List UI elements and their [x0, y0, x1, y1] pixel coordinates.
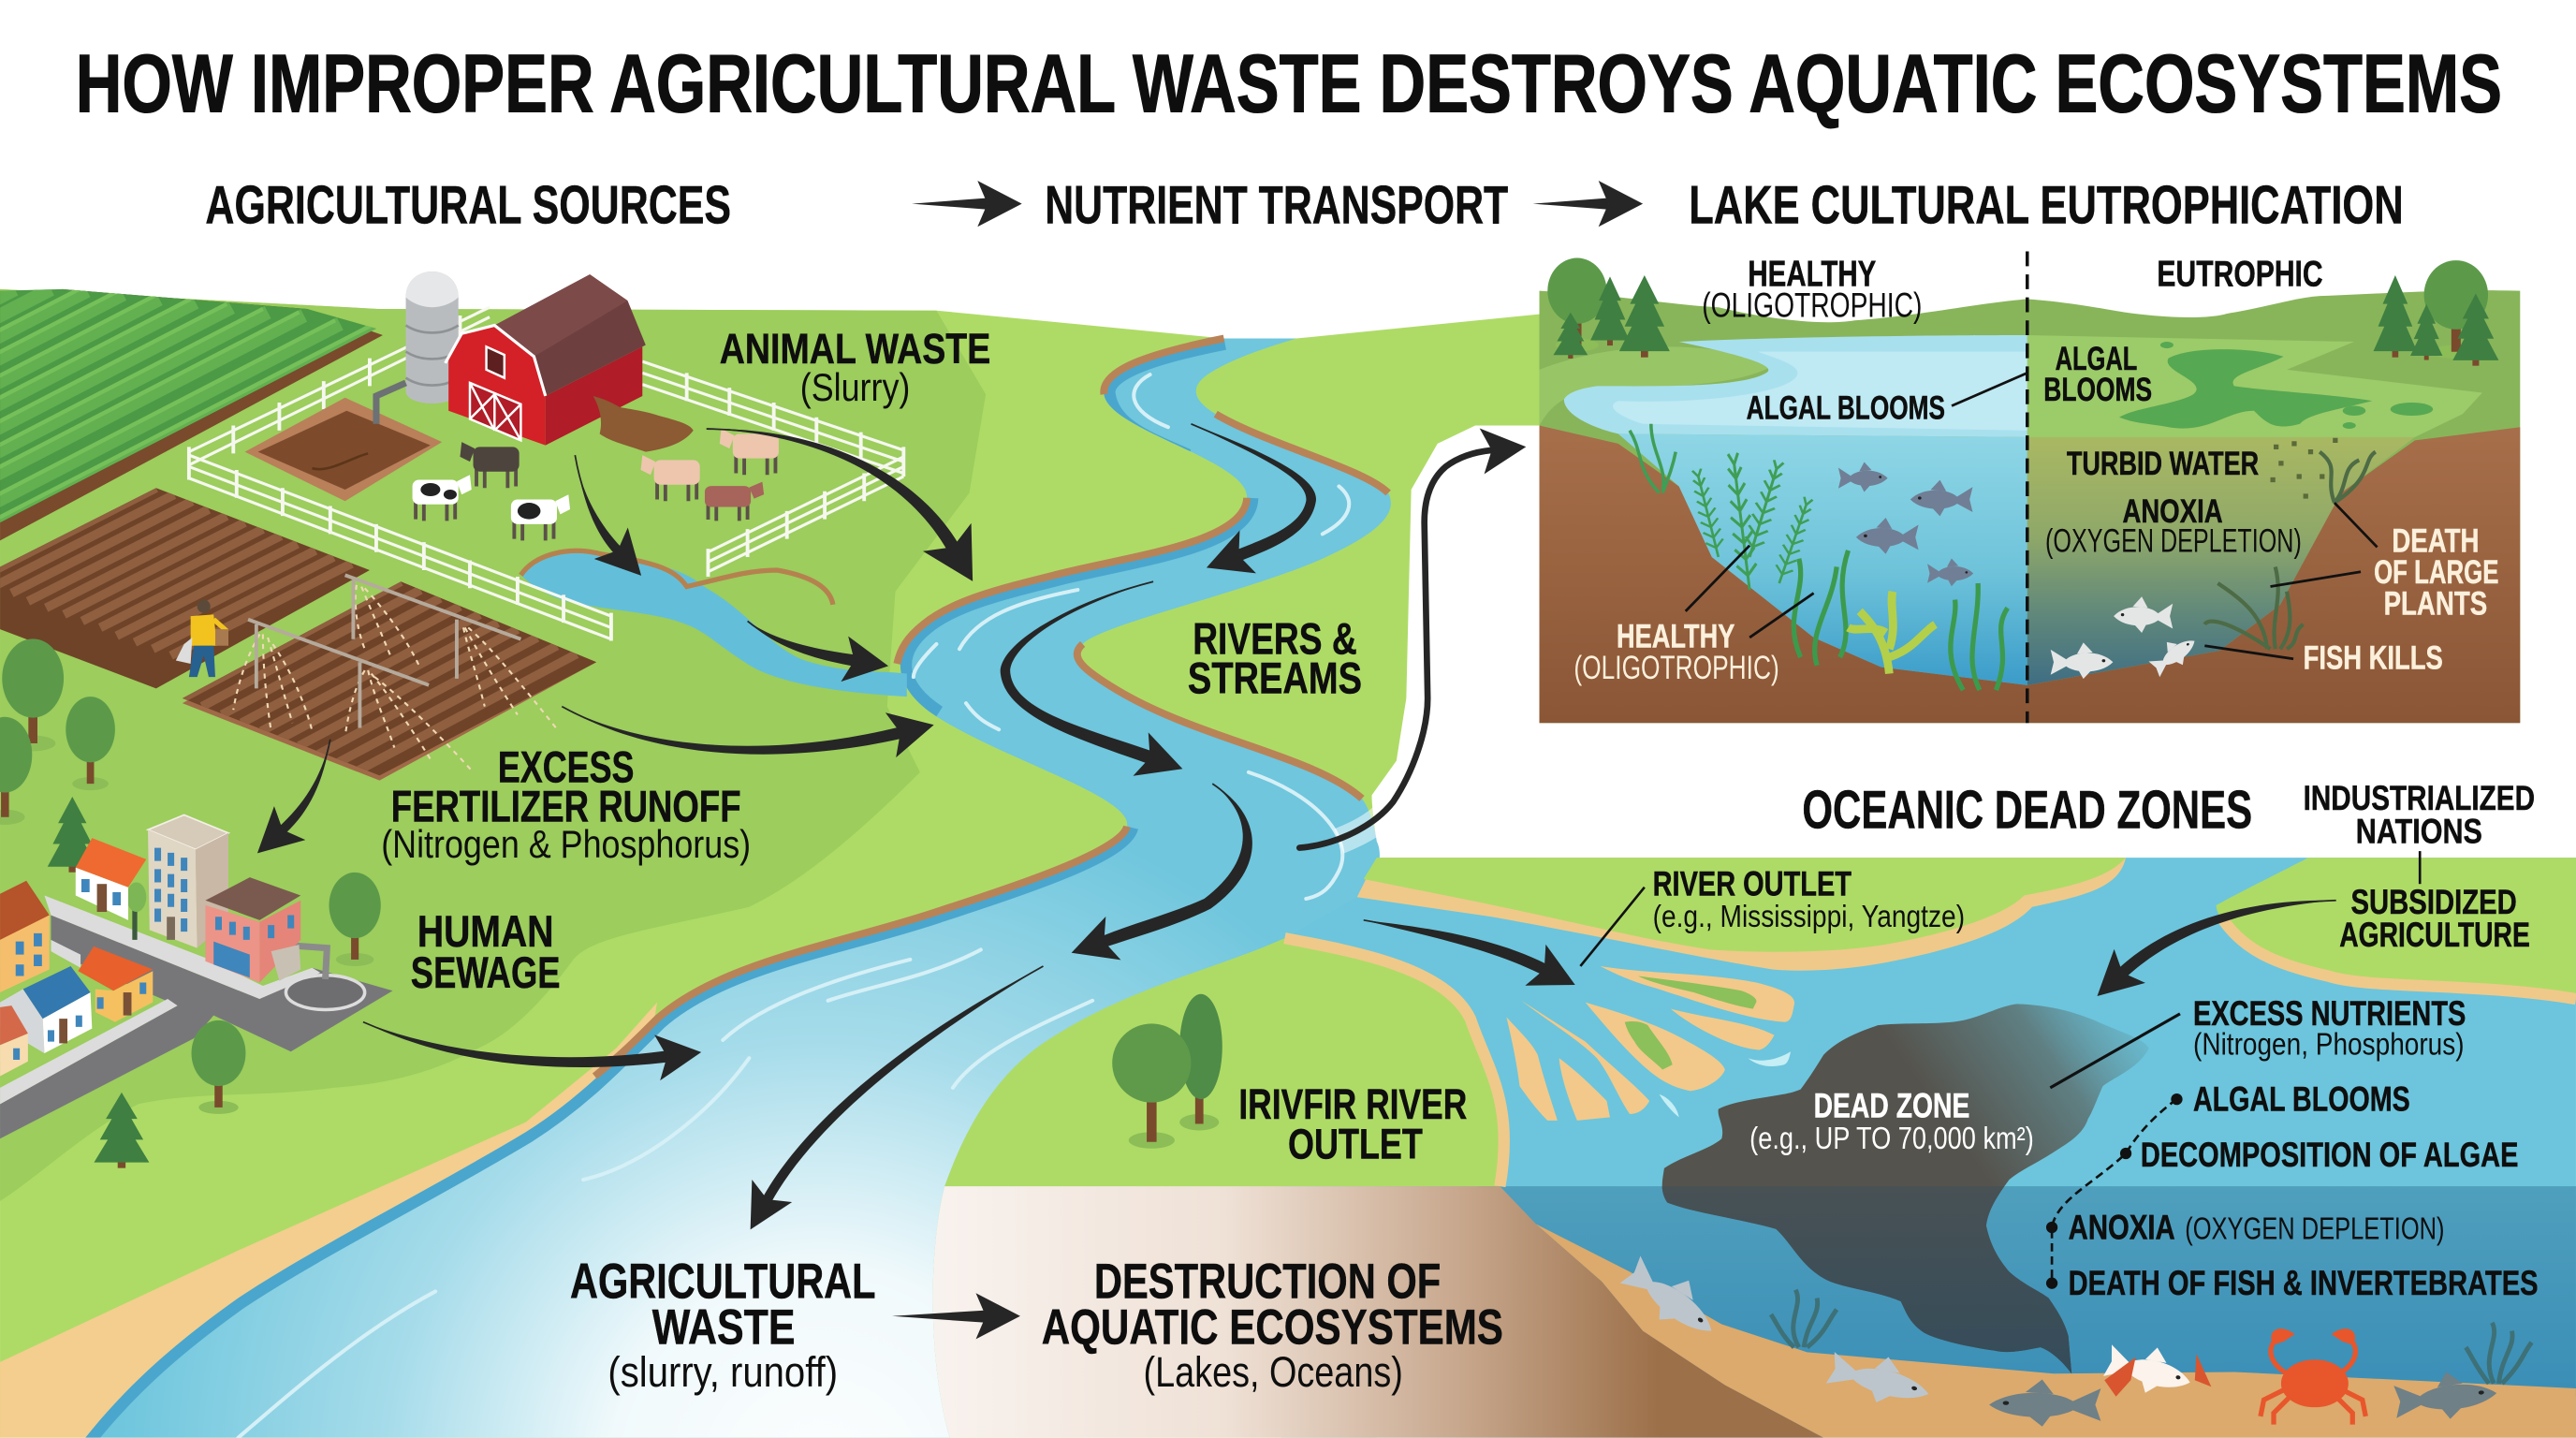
- lake: small algae dots: [2160, 342, 2433, 429]
- lake: label algal blooms eutrophic: [2043, 341, 2152, 408]
- heading: nutrient transport: NUTRIENT TRANSPORT: [1045, 176, 1508, 236]
- white margin behind lake panel and ocean heading: [1372, 426, 2576, 858]
- label: excess fertilizer runoff: [381, 742, 751, 866]
- label: excess nutrients: [2193, 994, 2466, 1063]
- arrow: waste to destruction: [892, 1311, 986, 1323]
- label: excess nutrients: (Nitrogen, Phosphorus): [2193, 1028, 2465, 1063]
- lake: healthy fish: [1838, 462, 1973, 586]
- holstein cow two: [511, 494, 570, 540]
- label: excess nutrients: EXCESS NUTRIENTS: [2193, 994, 2466, 1033]
- top right land: [2217, 858, 2576, 994]
- iriver land with trees: [944, 938, 1504, 1186]
- tall building: [148, 814, 228, 948]
- label: river outlet delta: (e.g., Mississippi, Yangtze): [1653, 900, 1965, 934]
- land: darker pasture hill: [0, 289, 986, 1201]
- heading: oceanic dead zones: OCEANIC DEAD ZONES: [1802, 781, 2252, 841]
- trees left: [0, 638, 381, 1168]
- label: animal waste: ANIMAL WASTE: [720, 325, 990, 373]
- silver fish two: [1824, 1343, 1935, 1415]
- timeline: algal blooms: ALGAL BLOOMS: [2193, 1079, 2410, 1118]
- arrow: field to town: [279, 740, 330, 833]
- sewage tank: [281, 945, 365, 1009]
- fence: [189, 307, 903, 640]
- label: river outlet land: [1238, 1080, 1467, 1167]
- label: agricultural waste: [570, 1254, 875, 1396]
- tree: [2, 638, 64, 751]
- label: human sewage: HUMAN: [417, 907, 554, 957]
- label: agricultural waste: AGRICULTURAL: [570, 1254, 875, 1309]
- upper delta land: [1364, 858, 2126, 952]
- arrow: subsidized agriculture to dead zone: [2118, 901, 2336, 977]
- lake: label anoxia: ANOXIA: [2123, 493, 2223, 530]
- delta foam: [1660, 1051, 1791, 1117]
- lake: eutrophic surface: [2027, 335, 2482, 437]
- lake: trees right: [2374, 260, 2498, 366]
- weeds: [1630, 424, 1676, 493]
- timeline: dead zone process: [2046, 1079, 2539, 1302]
- label: destruction of aquatic ecosystems: AQUATIC ECOSYSTEMS: [1042, 1300, 1503, 1356]
- arrow: header two: [1532, 198, 1608, 210]
- tree three: [0, 717, 32, 825]
- lake: label death of large plants: OF LARGE: [2374, 554, 2498, 591]
- fern two: [1688, 467, 1727, 559]
- white and red fish: [2102, 1336, 2211, 1403]
- lake: label anoxia: [2045, 493, 2302, 560]
- dark cow: [460, 442, 520, 488]
- label: destruction of aquatic ecosystems: [1042, 1254, 1503, 1396]
- label: animal waste: (Slurry): [800, 365, 910, 409]
- lake: soil: [1540, 426, 2520, 723]
- label: dead zone: DEAD ZONE: [1814, 1086, 1969, 1124]
- blue roof house: [0, 966, 92, 1053]
- fern three: [1740, 459, 1788, 560]
- lake: hills: [1540, 290, 2520, 723]
- tree: [1547, 258, 1606, 352]
- silver fish: [1617, 1248, 1727, 1349]
- top right land sand edge: [2221, 917, 2576, 999]
- village roads: [0, 895, 393, 1138]
- lake: eutrophic dying plants: [2204, 452, 2376, 649]
- yellow house: [0, 881, 50, 992]
- label: agricultural waste: WASTE: [652, 1300, 795, 1356]
- village: [0, 814, 365, 1077]
- label: river outlet delta: RIVER OUTLET: [1653, 864, 1852, 902]
- arrow: barn to pond: [575, 455, 621, 553]
- grey fish: [2393, 1368, 2498, 1424]
- lake: leader lines: [1686, 373, 2378, 659]
- timeline: anoxia: [2069, 1208, 2445, 1246]
- pine behind: [1590, 276, 1630, 345]
- lake: turbid particles: [2271, 440, 2337, 496]
- river: dark shaded edge and brown banks: [85, 339, 1247, 1438]
- fish four: [1927, 559, 1973, 586]
- arrow: river two: [1001, 581, 1153, 764]
- slurry pile: [593, 396, 694, 452]
- lake: label healthy soil: (OLIGOTROPHIC): [1573, 650, 1779, 686]
- sea: [1281, 858, 2576, 1438]
- corner house: [0, 1005, 28, 1077]
- village tree: [329, 873, 381, 966]
- arrow: stream: [748, 621, 856, 667]
- pink building: [205, 877, 300, 983]
- label: human sewage: [411, 907, 561, 998]
- livestock: [413, 429, 779, 540]
- lake: text healthy heading: (OLIGOTROPHIC): [1702, 286, 1922, 325]
- lake: label algal blooms healthy: ALGAL BLOOMS: [1747, 390, 1945, 427]
- small green tree: [126, 882, 146, 940]
- upper delta sand: [1357, 858, 2126, 971]
- lake: text healthy heading: [1702, 254, 1922, 325]
- label: agricultural waste: (slurry, runoff): [607, 1348, 838, 1396]
- farmer: [176, 600, 228, 677]
- barn: [446, 274, 646, 446]
- crop field: [0, 288, 383, 541]
- flow arrows on land and river: [279, 424, 2336, 1323]
- connector: nations to agriculture: [2419, 851, 2421, 884]
- ocean dead animals: [1617, 1248, 2498, 1427]
- label: industrialized nations: NATIONS: [2356, 812, 2482, 850]
- lake: label healthy soil: [1573, 618, 1779, 686]
- dark fish: [1989, 1380, 2100, 1427]
- pine: [48, 797, 97, 873]
- pig: [705, 482, 764, 521]
- tree: [2424, 260, 2488, 359]
- label: human sewage: SEWAGE: [411, 948, 561, 998]
- pond bank and creek: [520, 550, 833, 605]
- dead zone lower part: [1662, 1168, 2071, 1373]
- label: destruction of aquatic ecosystems: DESTRUCTION OF: [1094, 1254, 1441, 1309]
- lake: healthy surface highlight: [1613, 352, 2027, 431]
- lake: algae patches: [2119, 349, 2372, 429]
- lake: label death of large plants: DEATH: [2392, 523, 2479, 560]
- arrow: to delta: [1364, 920, 1547, 975]
- lake: dashed divider: [2027, 252, 2028, 723]
- river: [0, 339, 1391, 1438]
- label: dead zone: (e.g., UP TO 70,000 km²): [1749, 1122, 2034, 1156]
- crab: [2261, 1329, 2365, 1425]
- pink cow two: [641, 455, 700, 501]
- label: river outlet delta: [1653, 864, 1965, 934]
- orange roof house: [76, 838, 146, 920]
- ploughed field one: [0, 488, 370, 688]
- fish: [1838, 462, 1888, 492]
- lake: text healthy heading: HEALTHY: [1748, 254, 1876, 294]
- label: rivers and streams: RIVERS &: [1193, 615, 1357, 665]
- lake: healthy surface: [1564, 335, 2027, 437]
- lake panel: [1540, 252, 2520, 723]
- land base: [0, 289, 1543, 1438]
- label: rivers and streams: [1188, 615, 1362, 704]
- label: excess fertilizer runoff: EXCESS: [498, 742, 634, 792]
- label: industrialized nations: [2304, 779, 2535, 850]
- tree two: [66, 697, 115, 790]
- pink cow: [720, 429, 779, 475]
- delta green island: [1638, 976, 1756, 1009]
- fish two: [1910, 480, 1972, 516]
- arrow: sewage: [363, 1022, 667, 1067]
- label: destruction of aquatic ecosystems: (Lakes, Oceans): [1144, 1348, 1403, 1396]
- lake: eutrophic water: [2027, 437, 2415, 685]
- deep sea band: [1479, 1186, 2576, 1397]
- pine: [2374, 275, 2417, 358]
- lake: label turbid water: TURBID WATER: [2067, 446, 2259, 482]
- timeline: anoxia: ANOXIA: [2069, 1208, 2175, 1246]
- fern four: [1771, 495, 1817, 586]
- ocean floor sand: [1536, 1224, 2576, 1438]
- arrow: fertilizer runoff: [562, 707, 902, 755]
- label: rivers and streams: STREAMS: [1188, 654, 1362, 704]
- ploughed field two: [183, 581, 596, 781]
- lake: label anoxia: (OXYGEN DEPLETION): [2045, 523, 2302, 560]
- lake: label fish kills: FISH KILLS: [2304, 639, 2443, 676]
- lake: trees left: [1547, 258, 1670, 359]
- label: excess fertilizer runoff: FERTILIZER RUNOFF: [391, 783, 741, 832]
- arrow: river three: [1102, 784, 1252, 946]
- fern: [1723, 452, 1760, 591]
- pine small: [1553, 313, 1588, 359]
- yellow kelp: [1848, 592, 1935, 674]
- river ripples: [239, 374, 1349, 1438]
- arrow: river four: [763, 966, 1044, 1202]
- label: subsidized agriculture: SUBSIDIZED: [2351, 883, 2517, 921]
- manure lagoon: [245, 398, 442, 501]
- arrow: river one: [1191, 424, 1316, 561]
- beige destruction panel: [933, 1186, 1823, 1438]
- sand shore: lower river: [0, 1003, 657, 1438]
- lake: healthy plants: [1630, 424, 2008, 690]
- roadside tree: [192, 1020, 245, 1114]
- pine small: [2410, 304, 2442, 360]
- dead fish three: [2145, 629, 2202, 680]
- leader: excess nutrients: [2050, 1014, 2180, 1088]
- pine: [1619, 275, 1670, 358]
- dead fish two: [2051, 642, 2113, 679]
- seagrass: [1793, 550, 2008, 690]
- lake: label healthy soil: HEALTHY: [1617, 618, 1734, 654]
- label: river outlet land: IRIVFIR RIVER: [1238, 1080, 1467, 1128]
- sprinkler system: [233, 575, 559, 772]
- arrow: animal waste: [707, 429, 959, 550]
- silo: [376, 271, 459, 424]
- ocean seaweed: [1771, 1290, 2532, 1384]
- delta green island two: [1625, 1021, 1673, 1070]
- leader: river outlet: [1580, 888, 1645, 966]
- label: river outlet land: OUTLET: [1288, 1120, 1423, 1167]
- pond and tributary stream: [520, 550, 907, 697]
- arrow: river to lake panel: [1299, 450, 1492, 848]
- lake: label death of large plants: PLANTS: [2384, 585, 2487, 622]
- label: animal waste: [720, 325, 990, 409]
- tree tall: [1179, 994, 1222, 1130]
- dead zone plume: [1662, 1004, 2149, 1373]
- pine two: [94, 1093, 149, 1168]
- lake: text eutrophic heading: EUTROPHIC: [2157, 254, 2323, 294]
- dead fish: [2114, 596, 2173, 633]
- lake: label algal blooms eutrophic: ALGAL: [2056, 341, 2137, 377]
- timeline: anoxia: (OXYGEN DEPLETION): [2185, 1211, 2445, 1246]
- fish three: [1856, 518, 1919, 554]
- label: dead zone: [1749, 1086, 2034, 1156]
- lake: dead fish: [2051, 596, 2202, 680]
- delta islands and channels: [1506, 966, 1794, 1121]
- arrow: header one: [912, 198, 988, 210]
- lake: healthy water: [1618, 433, 2027, 685]
- label: subsidized agriculture: [2339, 883, 2530, 954]
- tree round: [1112, 1023, 1191, 1149]
- pine two: [2452, 293, 2498, 366]
- lake: left shore lighter: [1540, 346, 1774, 426]
- lake: label algal blooms eutrophic: BLOOMS: [2043, 372, 2152, 408]
- lake: label death of large plants: [2374, 523, 2498, 622]
- heading: agricultural sources: AGRICULTURAL SOURCES: [205, 176, 731, 236]
- label: excess fertilizer runoff: (Nitrogen & Phosphorus): [381, 822, 751, 866]
- small orange house: [78, 946, 153, 1022]
- river: fade to white at the mouth: [158, 870, 1234, 1438]
- holstein cow: [413, 475, 472, 521]
